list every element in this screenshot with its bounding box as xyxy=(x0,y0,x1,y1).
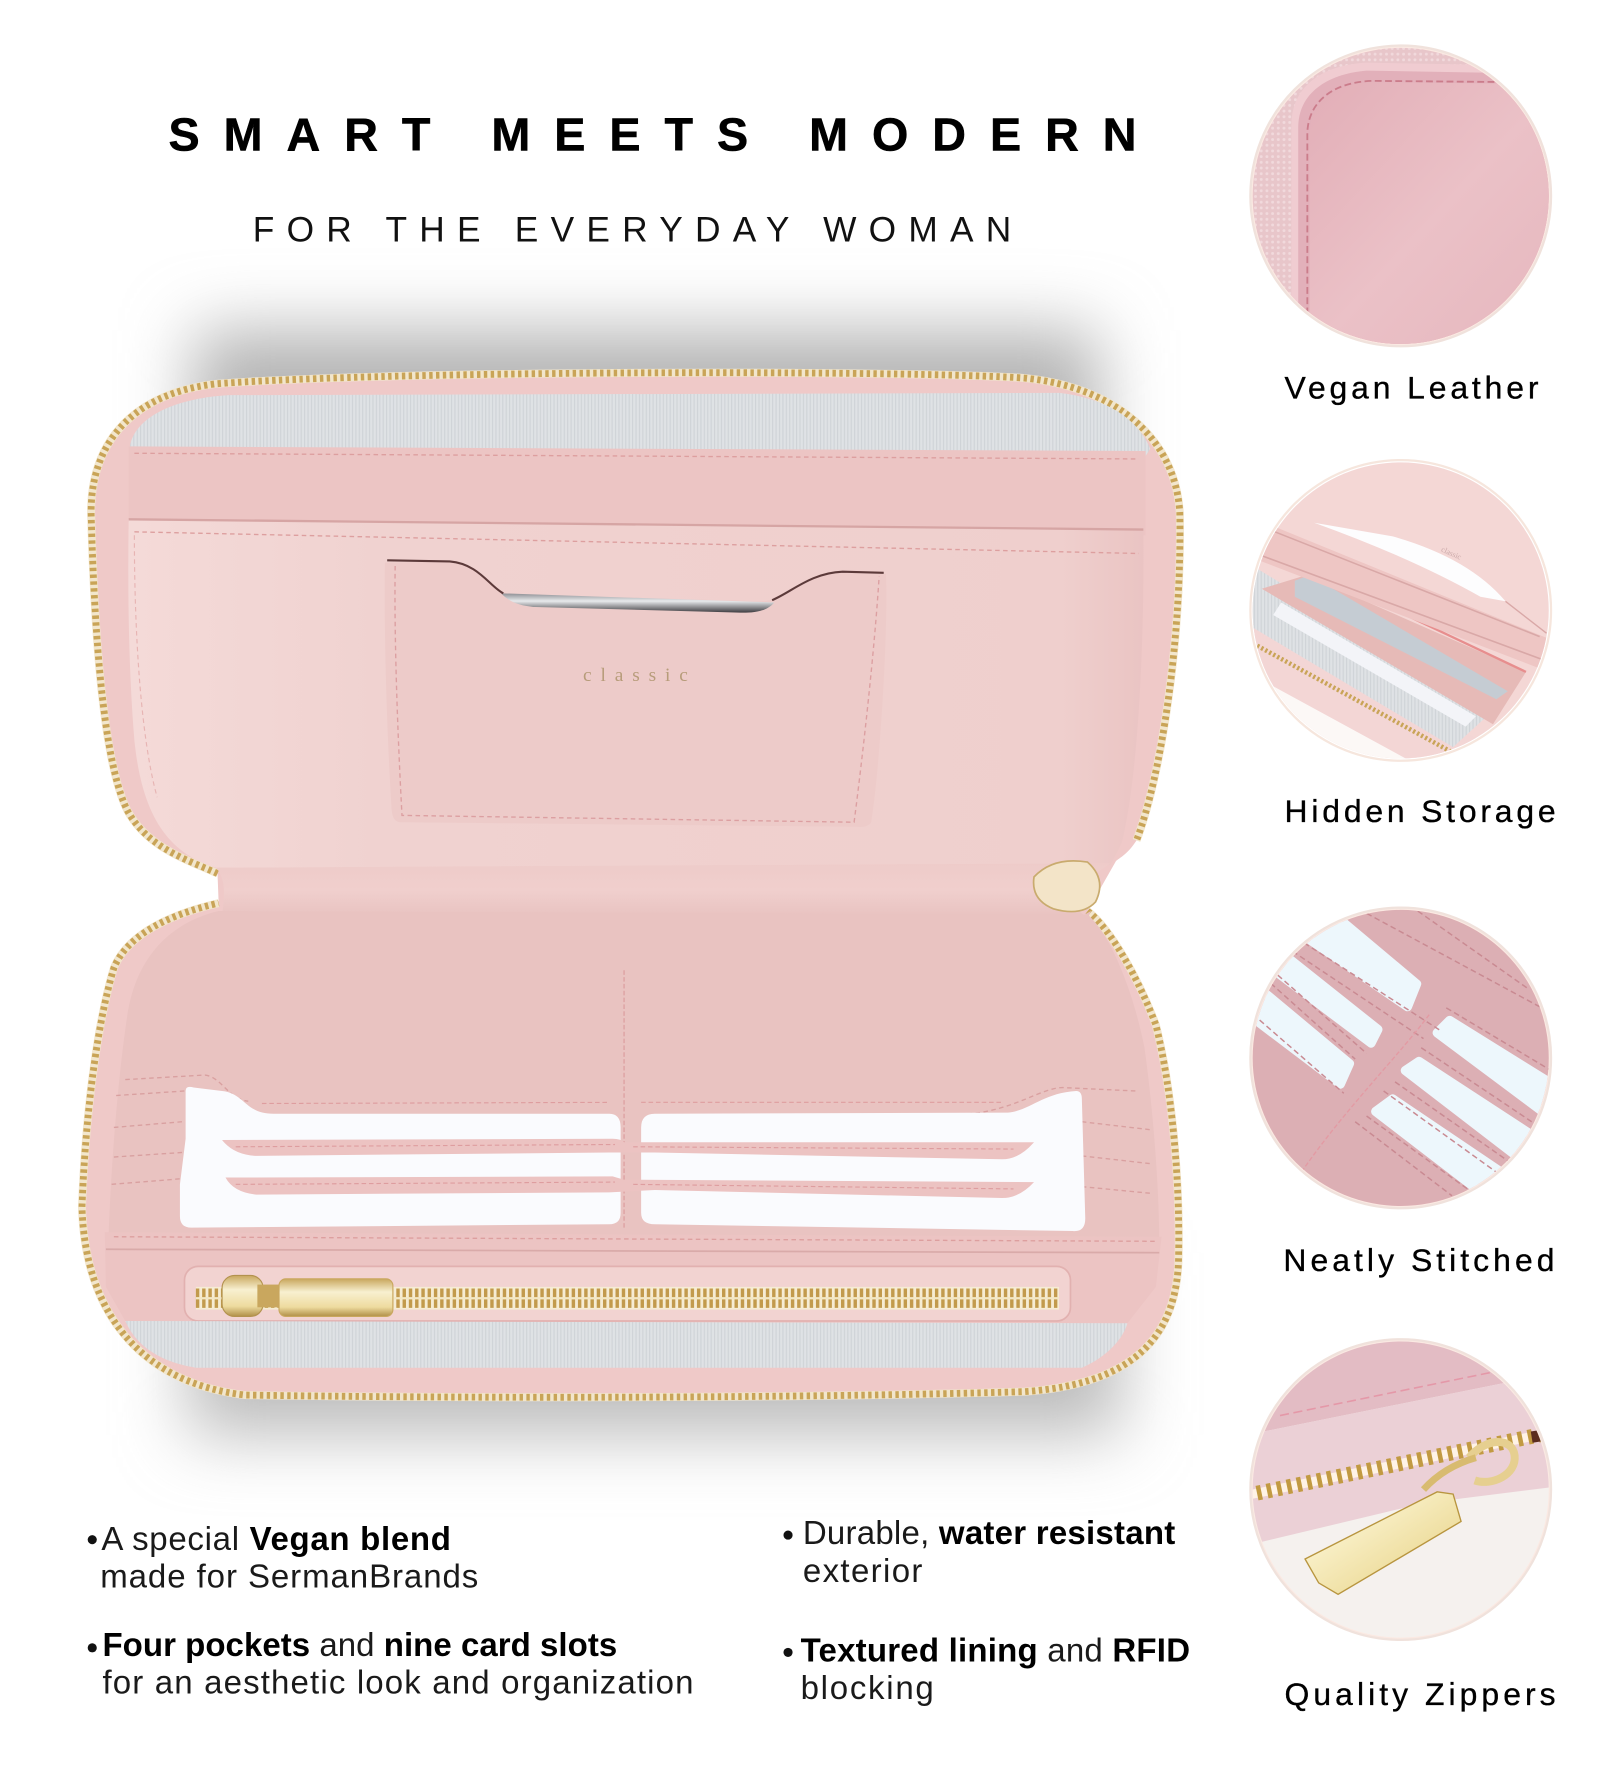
zipper tape xyxy=(1247,1383,1560,1545)
subtitle: FOR THE EVERYDAY WOMAN xyxy=(253,210,1011,249)
chain teeth xyxy=(1247,1435,1540,1495)
label: quality zippers: Quality Zippers xyxy=(1285,1676,1556,1712)
brand mark: classic xyxy=(1440,545,1463,562)
inner pocket leather strip xyxy=(1262,575,1526,724)
front pocket lip xyxy=(1261,528,1546,668)
gray lining xyxy=(1247,569,1492,747)
stitching xyxy=(1239,911,1551,1196)
bullet: pockets and card slots: Four pockets and nine card slots xyxy=(102,1626,617,1663)
cross seam xyxy=(1302,1015,1429,1172)
wallet outer tape xyxy=(82,373,1180,1397)
bullet: pockets and card slots: for an aesthetic look and organization xyxy=(102,1663,694,1700)
side card slot stitches xyxy=(112,1075,1152,1193)
bullet: water resistant: exterior xyxy=(803,1552,922,1589)
pocket zipper teeth xyxy=(196,1288,1059,1308)
silver card xyxy=(1295,575,1508,699)
bullet: water resistant xyxy=(783,1514,1175,1589)
detail circle: vegan leather xyxy=(1247,40,1560,353)
detail circle: hidden storage xyxy=(1247,456,1560,774)
brand text: classic xyxy=(583,665,688,686)
bullet: vegan blend xyxy=(88,1520,478,1594)
bullet: vegan blend: A special Vegan blend xyxy=(101,1520,451,1557)
bullet: lining and RFID xyxy=(783,1632,1190,1706)
card slot sliver xyxy=(501,593,774,613)
upper leather xyxy=(1252,462,1549,758)
title: SMART MEETS MODERN xyxy=(169,108,1137,160)
metal snap xyxy=(1034,861,1100,932)
bullet: water resistant: Durable, water resistant xyxy=(803,1514,1175,1551)
bullet: vegan blend: made for SermanBrands xyxy=(100,1557,478,1594)
upper panel xyxy=(128,519,1143,868)
gray lining top xyxy=(130,393,1150,458)
lower panel xyxy=(108,911,1159,1247)
zipper pull xyxy=(222,1275,393,1316)
gray lining bottom xyxy=(125,1321,1127,1368)
label: hidden storage: Hidden Storage xyxy=(1285,793,1556,829)
white slot sliver xyxy=(1314,523,1505,601)
textured tape xyxy=(1252,48,1482,302)
zipper tape xyxy=(1254,628,1476,758)
label: neatly stitched: Neatly Stitched xyxy=(1283,1242,1554,1278)
white cards xyxy=(180,1087,1085,1231)
bullet: pockets and card slots xyxy=(88,1626,694,1700)
leather surface xyxy=(1294,64,1479,300)
upper leather strip xyxy=(129,446,1146,535)
top leather xyxy=(1264,1342,1504,1432)
wallet drop shadow xyxy=(188,330,1122,1435)
zipper pull ring xyxy=(1469,1442,1515,1482)
feature list left column xyxy=(88,1520,694,1700)
pocket bands xyxy=(222,1139,1034,1159)
lower zip pocket xyxy=(105,1232,1162,1323)
white card bars xyxy=(1256,920,1548,1189)
detail circle: neatly stitched xyxy=(1249,906,1552,1210)
zipper teeth around wallet xyxy=(82,373,1180,1397)
bullet: lining and RFID: Textured lining and RFID xyxy=(801,1632,1190,1669)
detail circle: quality zippers xyxy=(1247,1332,1560,1646)
card pocket xyxy=(385,560,886,827)
label: vegan leather: Vegan Leather xyxy=(1285,370,1539,406)
white background below xyxy=(1274,686,1406,758)
zipper pull bar xyxy=(1305,1492,1461,1594)
bullet: lining and RFID: blocking xyxy=(801,1669,934,1706)
centre fold band xyxy=(216,863,1110,918)
feature list right column xyxy=(783,1514,1190,1706)
wallet illustration xyxy=(82,373,1180,1397)
white card xyxy=(1273,602,1476,727)
